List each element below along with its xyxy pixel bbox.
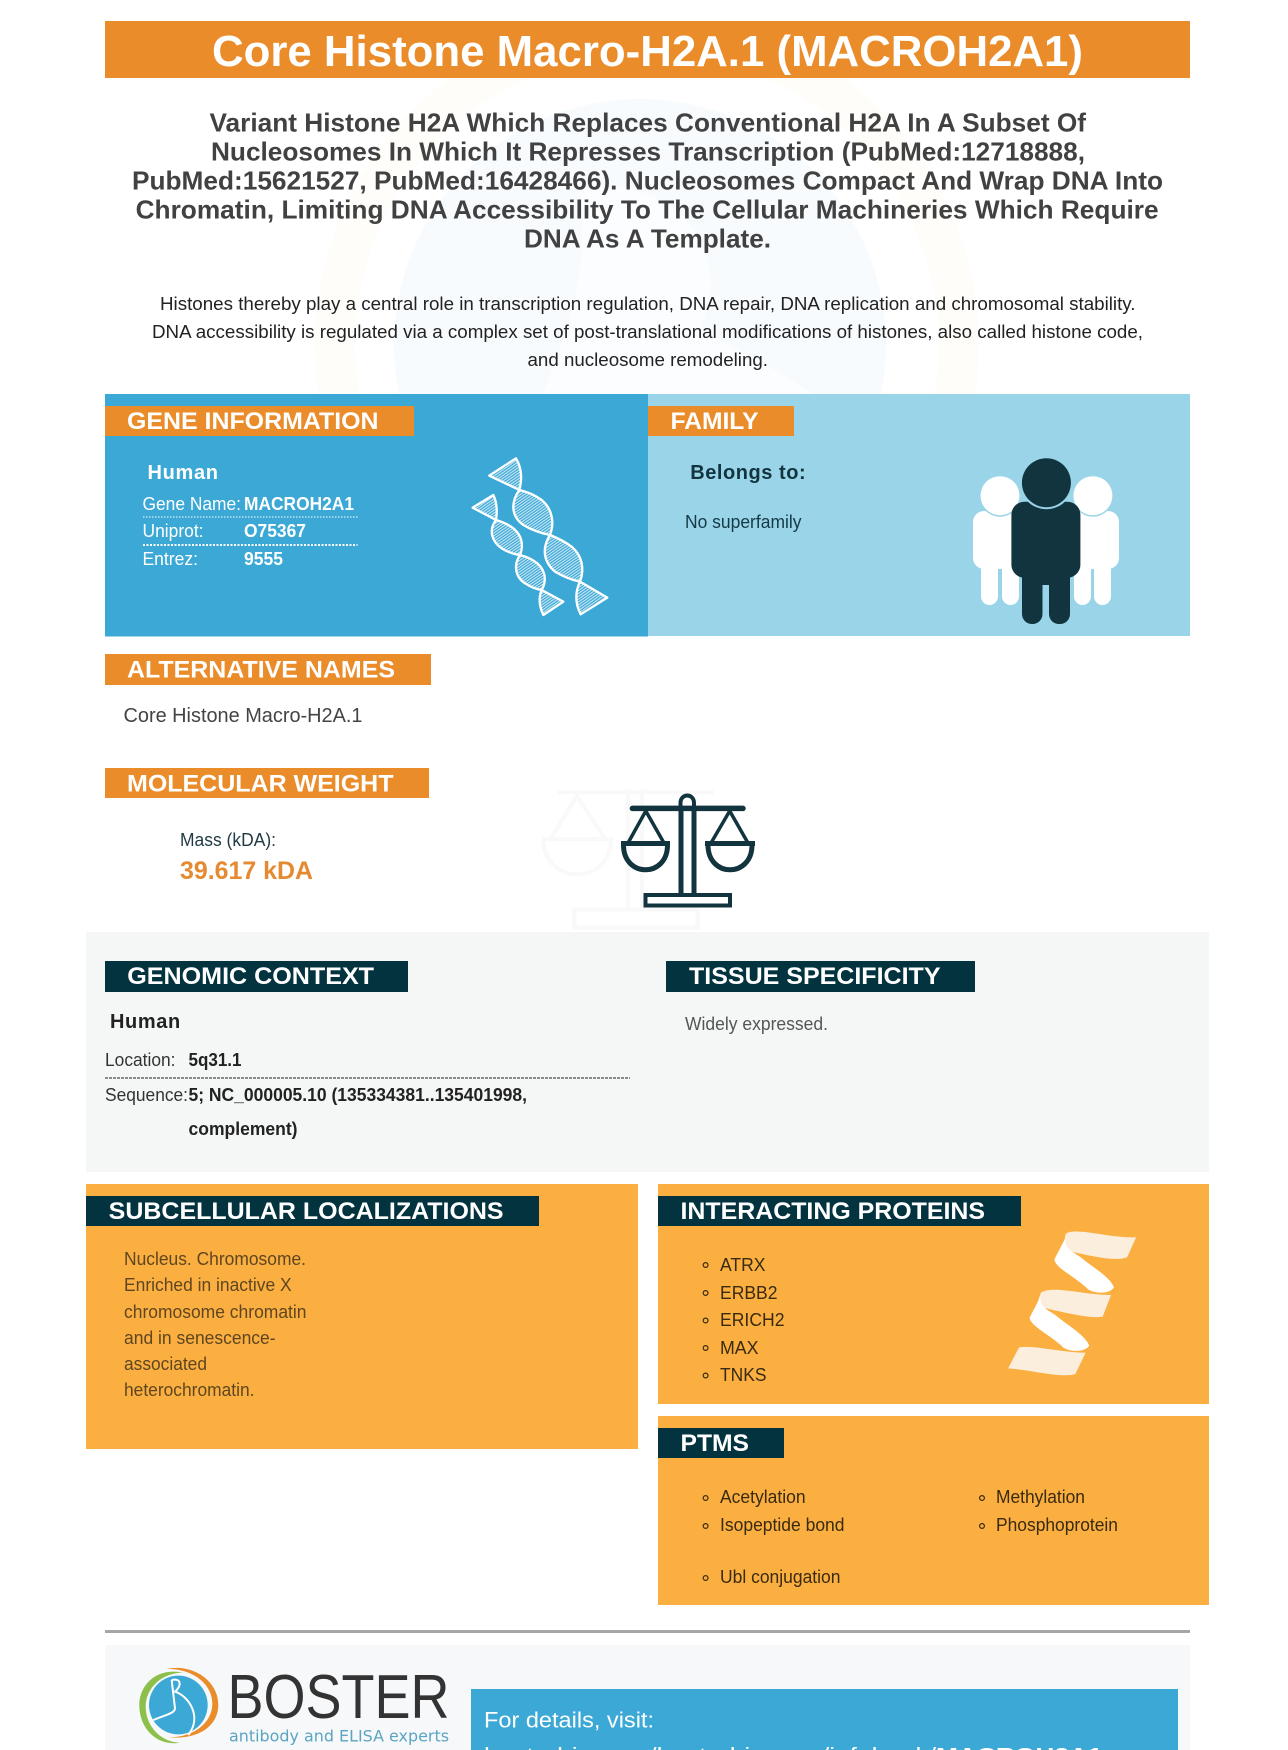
localization text: chromosome chromatin [124, 1302, 306, 1322]
protein list: MAX [720, 1338, 758, 1358]
icon: ghost scale [543, 789, 714, 927]
belongs to label: Belongs to: [690, 462, 806, 484]
panel: genomic context and tissue specificity [86, 932, 1209, 1172]
panel: subcellular localizations [86, 1184, 638, 1449]
protein list: ATRX [720, 1255, 766, 1275]
description paragraph [152, 293, 1143, 370]
heading: alternative names: ALTERNATIVE NAMES [127, 657, 395, 684]
location row: 5q31.1 [188, 1050, 242, 1070]
gene info table: 9555 [244, 549, 283, 569]
subtitle: Nucleosomes In Which It Represses Transcription (PubMed:12718888, [211, 136, 1085, 166]
subtitle: Chromatin, Limiting DNA Accessibility To The Cellular Machineries Which Require [136, 194, 1159, 224]
localization text: associated [124, 1354, 207, 1374]
icon: DNA helices [473, 458, 607, 615]
sequence row: Sequence: [105, 1085, 188, 1105]
protein list: TNKS [720, 1365, 766, 1385]
logo tagline: antibody and ELISA experts [229, 1727, 449, 1746]
PTM list: Phosphoprotein [996, 1515, 1118, 1535]
gene info table [142, 494, 358, 569]
heading: interacting proteins: INTERACTING PROTEINS [680, 1198, 985, 1225]
call to action box: For details, visit: [484, 1708, 654, 1733]
heading: genomic context [105, 961, 408, 992]
gene info table: MACROH2A1 [244, 494, 354, 514]
location row: Location: [105, 1050, 176, 1070]
logo wordmark: BOSTER [228, 1663, 450, 1732]
icon: balance scale [621, 796, 755, 906]
sequence row [105, 1085, 527, 1139]
subtitle: PubMed:15621527, PubMed:16428466). Nucleosomes Compact And Wrap DNA Into [132, 166, 1163, 196]
description paragraph: and nucleosome remodeling. [528, 349, 768, 370]
gene species label: Human [148, 462, 218, 484]
alternative names value: Core Histone Macro-H2A.1 [124, 705, 362, 727]
family value: No superfamily [685, 512, 802, 532]
footer panel [105, 1645, 1190, 1750]
mass value: 39.617 kDA [180, 857, 313, 885]
panel: gene information [105, 394, 648, 636]
heading: genomic context: GENOMIC CONTEXT [127, 963, 374, 990]
tissue specificity value: Widely expressed. [685, 1014, 828, 1034]
title banner: Core Histone Macro-H2A.1 (MACROH2A1) [212, 27, 1083, 76]
PTM list: Methylation [996, 1487, 1085, 1507]
PTM list: Ubl conjugation [720, 1567, 840, 1587]
PTM list [703, 1487, 1118, 1587]
panel: family [648, 394, 1190, 636]
gene info table: Gene Name: [142, 494, 241, 514]
subtitle: Variant Histone H2A Which Replaces Conventional H2A In A Subset Of [210, 108, 1086, 138]
heading: family [648, 406, 794, 436]
heading: gene information: GENE INFORMATION [127, 408, 378, 435]
heading: PTMs [658, 1428, 784, 1458]
heading: molecular weight: MOLECULAR WEIGHT [127, 771, 394, 798]
gene info table: Entrez: [142, 549, 198, 569]
protein list: ERICH2 [720, 1310, 784, 1330]
heading: family: FAMILY [670, 408, 758, 435]
heading: tissue specificity [666, 961, 975, 992]
mass label: Mass (kDA): [180, 830, 276, 850]
localization text: Enriched in inactive X [124, 1275, 292, 1295]
protein list: ERBB2 [720, 1283, 778, 1303]
localization text: heterochromatin. [124, 1380, 254, 1400]
PTM list: Isopeptide bond [720, 1515, 844, 1535]
call to action box [471, 1689, 1178, 1750]
localization text: Nucleus. Chromosome. [124, 1249, 306, 1269]
PTM list: Acetylation [720, 1487, 806, 1507]
panel: PTMs [658, 1416, 1209, 1605]
description paragraph: DNA accessibility is regulated via a complex set of post-translational modifications of histones, also called histone code, [152, 321, 1143, 342]
description paragraph: Histones thereby play a central role in transcription regulation, DNA repair, DNA replication and chromosomal stability. [160, 293, 1136, 314]
icon: people [973, 456, 1119, 624]
subtitle: DNA As A Template. [524, 224, 771, 254]
location row [105, 1050, 242, 1070]
panel: interacting proteins [658, 1184, 1209, 1404]
localization text [124, 1249, 306, 1400]
protein list [703, 1255, 784, 1385]
background watermark [315, 13, 979, 677]
gene info table: Uniprot: [142, 521, 204, 541]
heading: PTMs: PTMS [680, 1430, 749, 1457]
subtitle [132, 108, 1163, 254]
heading: subcellular localizations: SUBCELLULAR LOCALIZATIONS [109, 1198, 504, 1225]
title banner [105, 21, 1190, 78]
heading: tissue specificity: TISSUE SPECIFICITY [689, 963, 940, 990]
sequence row: complement) [188, 1119, 298, 1139]
gene info table: O75367 [244, 521, 306, 541]
genomic species label: Human [110, 1011, 180, 1033]
localization text: and in senescence- [124, 1328, 276, 1348]
icon: protein ribbon [1008, 1232, 1136, 1375]
icon: Boster logo mark [139, 1668, 218, 1743]
sequence row: 5; NC_000005.10 (135334381..135401998, [188, 1085, 527, 1105]
